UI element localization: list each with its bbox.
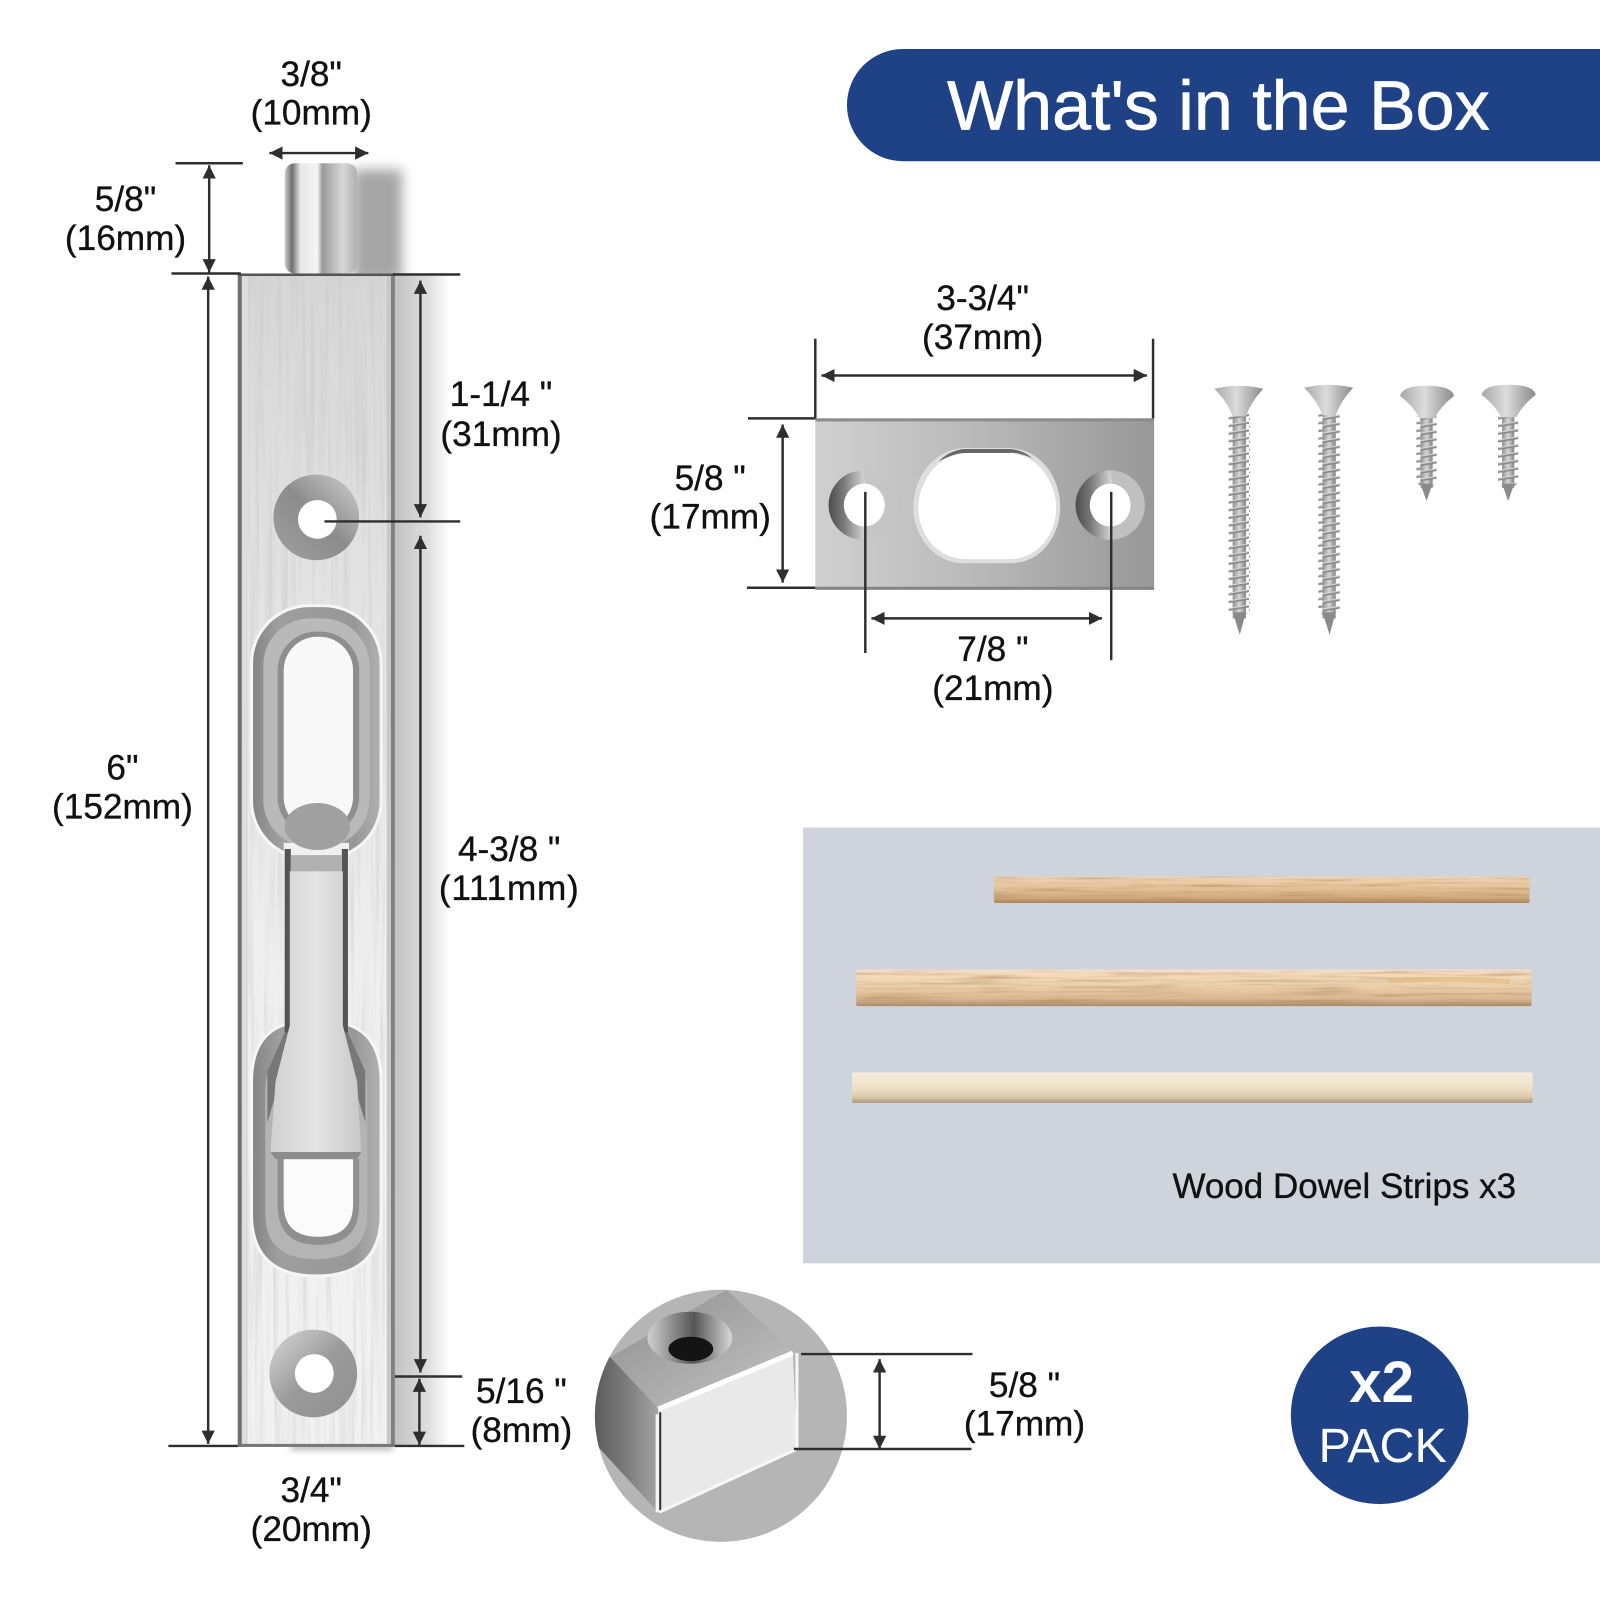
icon: long screw 1 xyxy=(1214,386,1263,635)
dimension: hole spacing 4-3/8 in: 4-3/8 " xyxy=(458,830,560,869)
dimension: strike plate width 3-3/4 in: (37mm) xyxy=(922,318,1043,357)
dimension: pin width 3/8 in: (10mm) xyxy=(251,93,372,132)
dimension: top to hole 1-1/4 in: 1-1/4 " xyxy=(450,375,552,414)
dimension: hole spacing 4-3/8 in: (111mm) xyxy=(439,869,579,908)
dowel: short top xyxy=(994,877,1530,903)
dimension: bolt end height 5/8 in xyxy=(794,1354,1085,1449)
dimension: pin height 5/8 in xyxy=(65,163,243,273)
dimension: hole spacing 4-3/8 in xyxy=(420,536,579,1372)
dimension: overall length 6 in: (152mm) xyxy=(52,787,193,826)
dimension: strike hole spacing 7/8 in: 7/8 " xyxy=(957,630,1028,669)
dimension: strike hole spacing 7/8 in: (21mm) xyxy=(932,669,1053,708)
dimension: plate width 3/4 in: 3/4" xyxy=(281,1471,342,1510)
panel: wood dowel strips xyxy=(803,828,1600,1263)
dimension: pin width 3/8 in: 3/8" xyxy=(281,55,342,94)
dimension: strike plate height 5/8 in: (17mm) xyxy=(650,498,771,537)
dowel: middle xyxy=(856,969,1532,1006)
dimension: strike plate height 5/8 in: 5/8 " xyxy=(675,459,746,498)
icon: long screw 2 xyxy=(1304,385,1353,635)
dimension: bottom to hole 5/16 in xyxy=(395,1372,572,1450)
dimension: strike plate width 3-3/4 in xyxy=(815,279,1153,418)
dowel label: Wood Dowel Strips x3 xyxy=(1172,1167,1516,1206)
icon: short screw 1 xyxy=(1400,386,1454,501)
dimension: bolt end height 5/8 in: (17mm) xyxy=(964,1405,1085,1444)
dimension: overall length 6 in: 6" xyxy=(106,749,138,788)
badge: x2 pack xyxy=(1291,1327,1468,1504)
dimension: strike hole spacing 7/8 in xyxy=(865,492,1111,708)
detail circle: bolt end close-up xyxy=(582,1290,847,1542)
dimension: pin height 5/8 in: (16mm) xyxy=(65,219,186,258)
icon: short screw 2 xyxy=(1482,385,1536,501)
dimension: pin width 3/8 in xyxy=(251,55,372,153)
dimension: plate width 3/4 in: (20mm) xyxy=(251,1510,372,1549)
dimension: top to hole 1-1/4 in: (31mm) xyxy=(440,415,562,454)
badge: x2 pack: PACK xyxy=(1318,1419,1447,1473)
dimension: plate width 3/4 in xyxy=(251,1471,372,1549)
strike plate xyxy=(815,418,1154,590)
dimension: top to hole 1-1/4 in xyxy=(324,274,562,521)
flush bolt product xyxy=(238,163,450,1450)
dimension: overall length 6 in xyxy=(52,277,238,1446)
dimension: bottom to hole 5/16 in: (8mm) xyxy=(471,1411,572,1450)
title banner: What's in the Box xyxy=(947,67,1490,145)
dowel: bottom xyxy=(852,1072,1533,1103)
title banner xyxy=(847,49,1600,161)
dimension: bottom to hole 5/16 in: 5/16 " xyxy=(476,1372,567,1411)
dimension: strike plate height 5/8 in xyxy=(650,418,815,588)
dimension: pin height 5/8 in: 5/8" xyxy=(95,180,156,219)
badge: x2 pack: x2 xyxy=(1349,1350,1414,1415)
dimension: strike plate width 3-3/4 in: 3-3/4" xyxy=(936,279,1029,318)
dimension: bolt end height 5/8 in: 5/8 " xyxy=(989,1366,1060,1405)
